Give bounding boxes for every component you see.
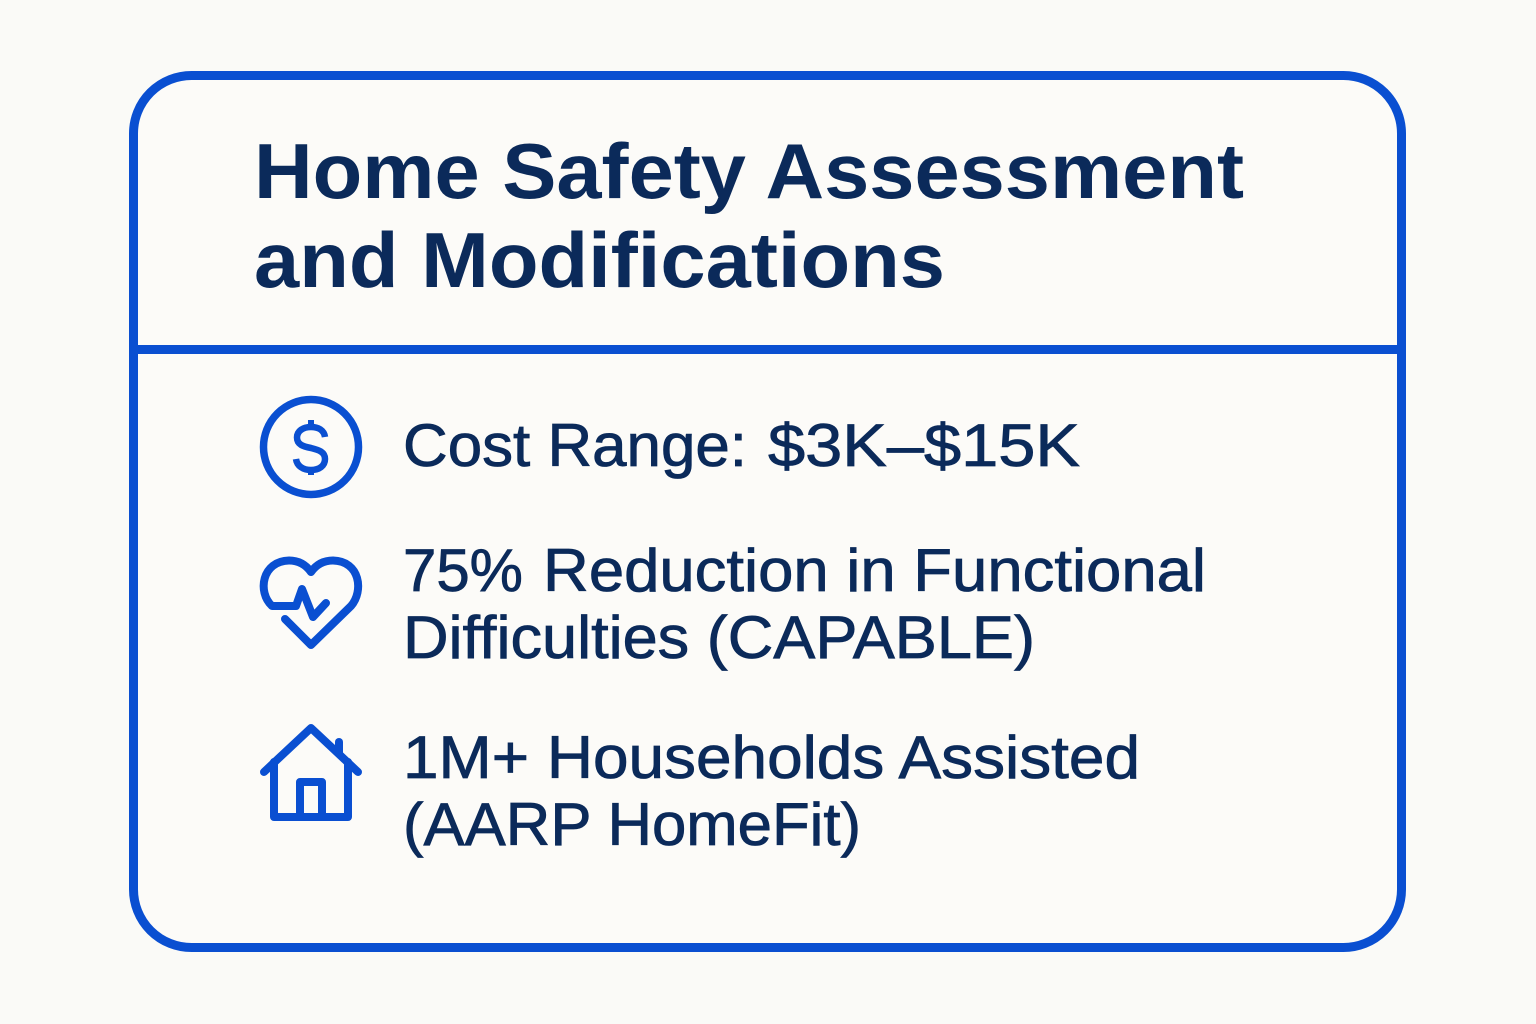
stat: cost range [403,412,1080,479]
title: and Modifications [254,216,945,304]
stat: households assisted: (AARP HomeFit) [403,791,861,858]
panel: home safety card [134,76,1402,948]
icon: house [264,728,358,817]
stat: households assisted: 1M+ Households Assisted [403,724,1140,791]
stat: households assisted [403,724,1140,858]
stat: reduction in functional difficulties: Reduction in Functional [543,537,1206,604]
stat: cost range: $3K–$15K [768,412,1080,479]
stat: reduction in functional difficulties [403,537,1206,671]
icon: heart with pulse [264,560,358,645]
stat: reduction in functional difficulties: Difficulties (CAPABLE) [403,604,1035,671]
stat: cost range: Cost Range: [403,412,747,479]
title [254,127,1244,304]
icon: dollar coin [264,400,358,494]
stat: reduction in functional difficulties: 75% [403,537,523,604]
title: Home Safety Assessment [254,127,1244,215]
